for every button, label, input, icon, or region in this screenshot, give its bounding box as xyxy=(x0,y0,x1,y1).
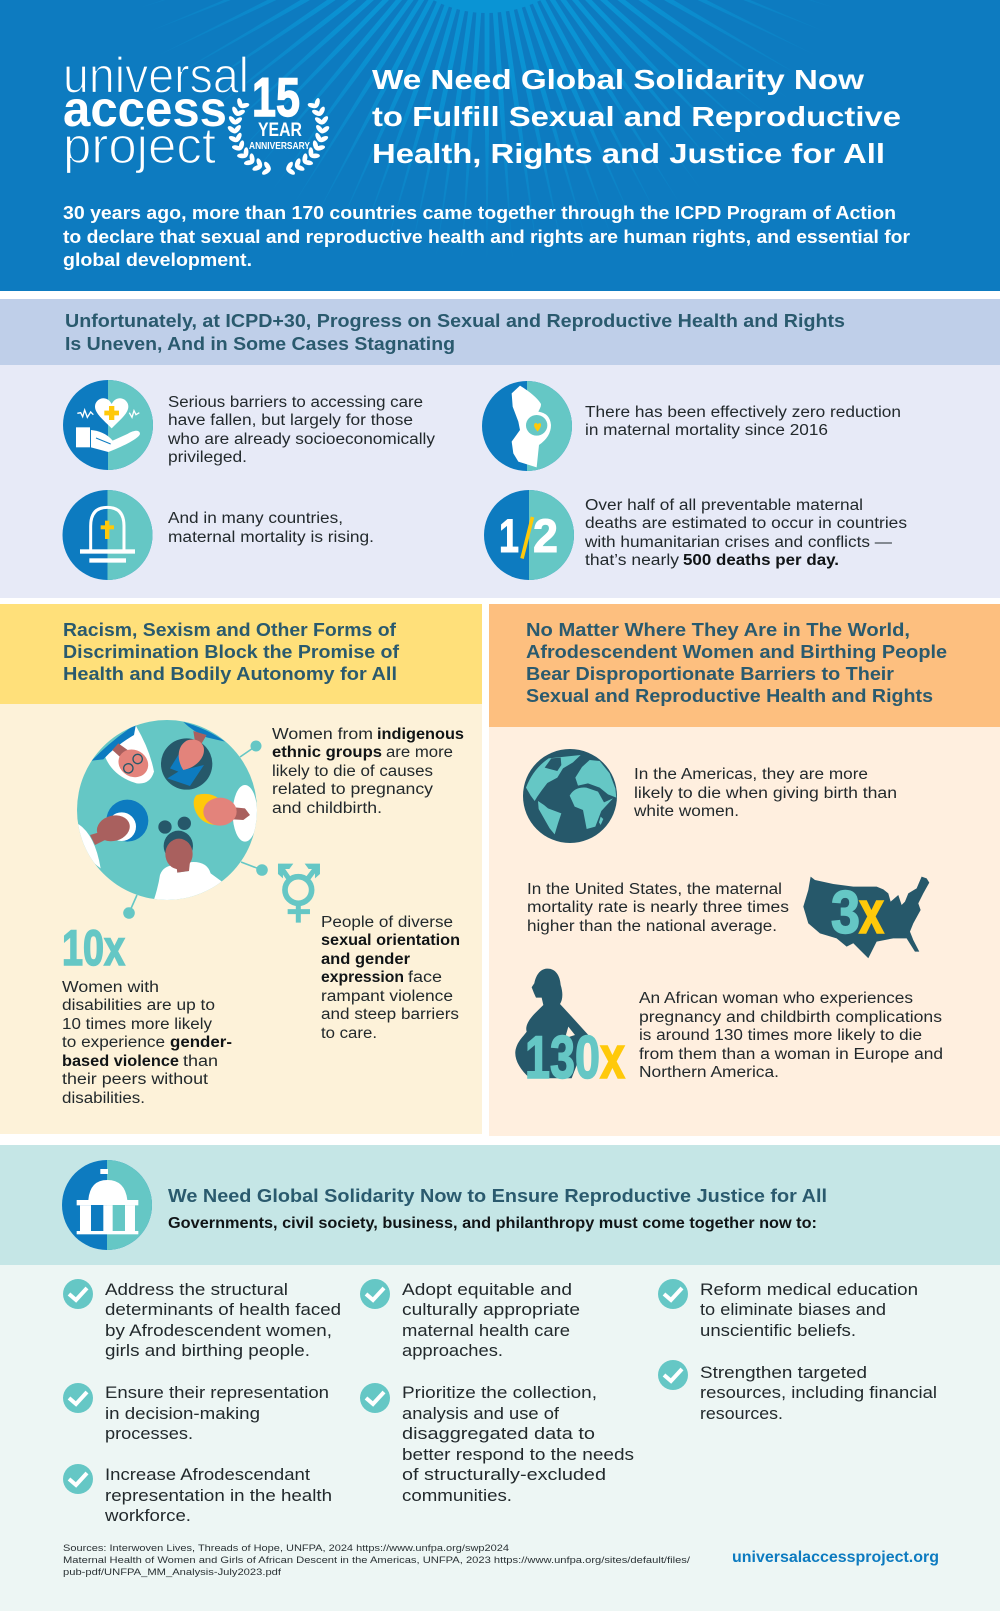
title: We Need Global Solidarity Now xyxy=(372,64,864,95)
list: column one: in decision-making xyxy=(105,1404,260,1423)
title: to Fulfill Sexual and Reproductive xyxy=(372,101,901,132)
badge: 15 year anniversary: YEAR xyxy=(258,120,302,141)
text: sexual orientation: expression xyxy=(321,969,404,986)
illustration: circle of women xyxy=(73,720,257,902)
sources: pub-pdf/UNFPA_MM_Analysis-July2023.pdf xyxy=(63,1567,281,1578)
text: disabilities: their peers without xyxy=(62,1071,209,1088)
panel: progress xyxy=(0,299,1000,598)
list: column one: determinants of health faced xyxy=(105,1300,341,1319)
list: column three: Reform medical education xyxy=(700,1280,918,1299)
stat: 10x: 10x xyxy=(62,920,125,976)
text: rising mortality xyxy=(168,510,374,546)
subheading: Governments, civil society, business, and philanthropy must come together now to: xyxy=(168,1215,817,1232)
title: Health, Rights and Justice for All xyxy=(372,138,885,169)
icon: globe xyxy=(523,749,617,843)
list: column three: unscientific beliefs. xyxy=(700,1321,856,1340)
list: column one: girls and birthing people. xyxy=(105,1341,310,1360)
list: column two: Prioritize the collection, xyxy=(402,1383,597,1402)
text: indigenous women: and childbirth. xyxy=(272,800,382,817)
intro text: 30 years ago, more than 170 countries came together through the ICPD Program of Action xyxy=(63,202,896,223)
text: united states xyxy=(527,881,789,935)
text: united states: In the United States, the maternal xyxy=(527,881,782,898)
text: indigenous women: likely to die of causes xyxy=(272,763,433,780)
text: sexual orientation: and gender xyxy=(321,951,410,968)
text: barriers: privileged. xyxy=(168,449,247,466)
heading: discrimination xyxy=(63,620,400,684)
heading: afrodescendant women: No Matter Where They Are in The World, xyxy=(526,620,910,640)
list: column one: representation in the health xyxy=(105,1486,332,1505)
text: indigenous women: Women from xyxy=(272,726,373,743)
panel: call to action xyxy=(0,1145,1000,1611)
icon: government building xyxy=(62,1160,152,1250)
heading: afrodescendant women: Afrodescendent Women and Birthing People xyxy=(526,642,947,662)
text: preventable deaths: deaths are estimated to occur in countries xyxy=(585,515,907,532)
list: column one: workforce. xyxy=(104,1506,191,1525)
icon: hand and heart xyxy=(63,380,153,470)
icon: us map 3x xyxy=(803,877,929,958)
text: preventable deaths: with humanitarian crises and conflicts — xyxy=(584,534,893,551)
text: americas xyxy=(633,766,897,820)
text: united states: mortality rate is nearly three times xyxy=(527,899,789,916)
heading: discrimination: Discrimination Block the Promise of xyxy=(63,642,400,662)
list: column one xyxy=(104,1280,341,1525)
text: zero reduction xyxy=(585,404,901,439)
list: column two: culturally appropriate xyxy=(402,1300,580,1319)
heading: afrodescendant women: Sexual and Reproductive Health and Rights xyxy=(526,686,933,706)
text: preventable deaths xyxy=(584,497,907,569)
text: disabilities: disabilities. xyxy=(62,1090,145,1107)
list: column two: of structurally-excluded xyxy=(402,1465,606,1484)
logo: universal access project: access xyxy=(63,81,227,137)
list: column two xyxy=(402,1280,634,1505)
text: disabilities: 10 times more likely xyxy=(62,1016,212,1033)
icon: pregnant figure xyxy=(482,381,572,471)
text: sexual orientation xyxy=(321,914,460,1042)
heading: progress xyxy=(65,311,845,354)
badge: 15 year anniversary: 15 xyxy=(252,66,300,128)
intro text: global development. xyxy=(63,249,252,270)
list: column one: by Afrodescendent women, xyxy=(105,1321,332,1340)
list: column two: maternal health care xyxy=(402,1321,570,1340)
panel: afrodescendant women xyxy=(489,604,1000,1136)
panel: header xyxy=(0,0,1000,291)
icon: tombstone xyxy=(62,490,152,580)
icon: silhouette 130x: 130 xyxy=(525,1024,600,1091)
text: zero reduction: There has been effectively zero reduction xyxy=(585,404,901,421)
text: african woman: from them than a woman in Europe and xyxy=(639,1046,943,1063)
text: indigenous women: ethnic groups xyxy=(272,744,382,761)
logo: universal access project: universal xyxy=(63,48,249,104)
text: indigenous women: are more xyxy=(386,744,453,761)
text: african woman: An African woman who experiences xyxy=(639,990,913,1007)
text: preventable deaths: 500 deaths per day. xyxy=(683,552,839,569)
icon: one half: 1 xyxy=(499,509,519,562)
list: column two: approaches. xyxy=(402,1341,503,1360)
text: african woman: is around 130 times more likely to die xyxy=(639,1027,922,1044)
list: column one: Ensure their representation xyxy=(105,1383,329,1402)
check icons xyxy=(63,1279,688,1494)
heading: discrimination: Racism, Sexism and Other Forms of xyxy=(63,620,397,640)
list: column three xyxy=(700,1280,937,1423)
list: column three: resources, including financial xyxy=(700,1383,937,1402)
website: universalaccessproject.org xyxy=(732,1549,939,1566)
text: rising mortality: maternal mortality is rising. xyxy=(168,529,374,546)
sources xyxy=(63,1543,690,1578)
icon: one half: 2 xyxy=(533,509,558,562)
title xyxy=(372,64,901,169)
list: column two: analysis and use of xyxy=(402,1404,559,1423)
text: african woman: pregnancy and childbirth complications xyxy=(639,1009,942,1026)
list: column three: to eliminate biases and xyxy=(700,1300,886,1319)
text: disabilities: gender- xyxy=(170,1034,232,1051)
list: column three: resources. xyxy=(700,1404,783,1423)
text: sexual orientation: rampant violence xyxy=(321,988,453,1005)
intro text xyxy=(63,202,910,270)
logo: universal access project xyxy=(63,48,249,174)
list: column three: Strengthen targeted xyxy=(700,1363,867,1382)
text: disabilities xyxy=(62,979,232,1107)
heading: progress: Is Uneven, And in Some Cases Stagnating xyxy=(65,334,455,354)
text: african woman xyxy=(639,990,943,1081)
text: barriers: have fallen, but largely for those xyxy=(168,412,413,429)
panel: discrimination xyxy=(0,604,482,1134)
text: preventable deaths: Over half of all preventable maternal xyxy=(585,497,863,514)
text: preventable deaths: that’s nearly xyxy=(585,552,679,569)
heading: discrimination: Health and Bodily Autonomy for All xyxy=(63,664,397,684)
text: americas: white women. xyxy=(633,803,739,820)
heading: call to action: We Need Global Solidarity Now to Ensure Reproductive Justice for All xyxy=(168,1186,827,1206)
text: barriers: Serious barriers to accessing care xyxy=(168,394,423,411)
icon: us map 3x: 3 xyxy=(831,879,860,946)
text: americas: In the Americas, they are more xyxy=(634,766,868,783)
text: disabilities: Women with xyxy=(62,979,159,996)
text: sexual orientation: People of diverse xyxy=(321,914,453,931)
list: column one: Address the structural xyxy=(105,1280,288,1299)
text: indigenous women: related to pregnancy xyxy=(272,781,433,798)
text: sexual orientation: to care. xyxy=(321,1025,377,1042)
sources: Sources: Interwoven Lives, Threads of Hope, UNFPA, 2024 https://www.unfpa.org/swp2024 xyxy=(63,1543,510,1554)
text: disabilities: disabilities are up to xyxy=(62,997,215,1014)
heading: afrodescendant women: Bear Disproportionate Barriers to Their xyxy=(526,664,894,684)
list: column two: better respond to the needs xyxy=(402,1445,634,1464)
text: african woman: Northern America. xyxy=(639,1064,779,1081)
badge: 15 year anniversary: ANNIVERSARY xyxy=(249,140,310,152)
text: rising mortality: And in many countries, xyxy=(168,510,343,527)
text: disabilities: based violence xyxy=(62,1053,179,1070)
text: barriers xyxy=(167,394,435,466)
sources: Maternal Health of Women and Girls of African Descent in the Americas, UNFPA, 2023 https://www.unfpa.org/sites/default/files/ xyxy=(63,1555,690,1566)
text: disabilities: than xyxy=(183,1053,218,1070)
text: sexual orientation: sexual orientation xyxy=(321,932,460,949)
icon: silhouette 130x xyxy=(515,969,625,1091)
icon: one half xyxy=(484,490,574,580)
list: column one: Increase Afrodescendant xyxy=(105,1465,310,1484)
badge: 15 year anniversary xyxy=(226,66,331,178)
logo: universal access project: project xyxy=(63,117,216,174)
intro text: to declare that sexual and reproductive health and rights are human rights, and essential for xyxy=(63,226,910,247)
text: barriers: who are already socioeconomically xyxy=(167,431,435,448)
text: disabilities: to experience xyxy=(62,1034,165,1051)
icon: us map 3x: x xyxy=(859,879,884,946)
connectors xyxy=(123,740,268,919)
list: column one: processes. xyxy=(105,1424,193,1443)
list: column two: disaggregated data to xyxy=(402,1424,595,1443)
text: zero reduction: in maternal mortality since 2016 xyxy=(585,422,828,439)
text: indigenous women xyxy=(272,726,464,817)
text: sexual orientation: and steep barriers xyxy=(321,1006,459,1023)
icon: transgender symbol xyxy=(278,864,320,923)
text: sexual orientation: face xyxy=(408,969,442,986)
icon: silhouette 130x: x xyxy=(600,1024,625,1091)
list: column two: Adopt equitable and xyxy=(402,1280,572,1299)
text: united states: higher than the national average. xyxy=(527,918,777,935)
heading: progress: Unfortunately, at ICPD+30, Progress on Sexual and Reproductive Health and Rights xyxy=(65,311,845,331)
heading: afrodescendant women xyxy=(526,620,947,706)
list: column two: communities. xyxy=(402,1486,512,1505)
text: indigenous women: indigenous xyxy=(377,726,464,743)
text: americas: likely to die when giving birth than xyxy=(634,785,897,802)
